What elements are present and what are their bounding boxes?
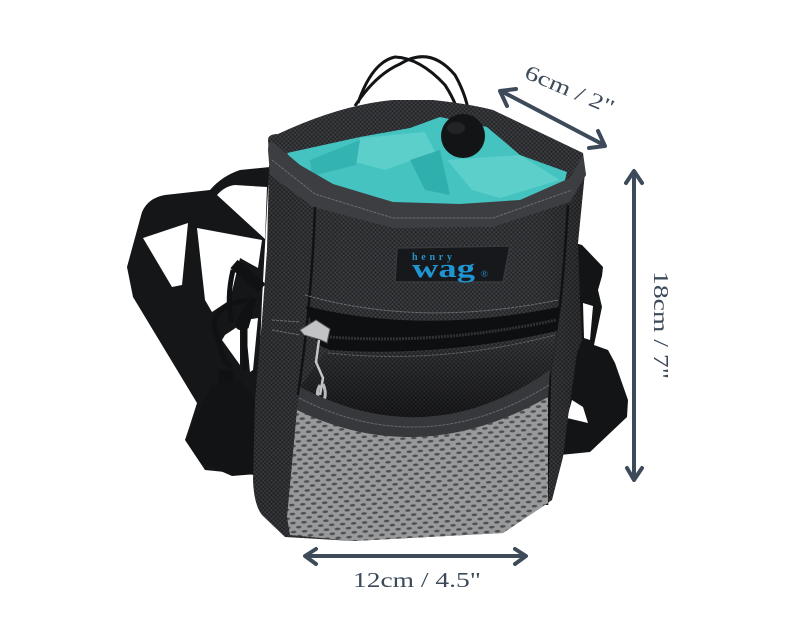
teal drawstring lining [287,117,567,212]
logo patch [395,246,510,283]
front rim binding [268,142,586,228]
logo patch: ® [481,269,488,279]
mesh pocket [287,370,550,541]
bag body [253,142,586,541]
label: 6cm / 2 inches: 6cm / 2" [521,60,618,119]
logo text: henry [412,252,452,263]
cord toggle [441,114,485,158]
upper pocket flap stitching [305,295,558,313]
label: 12cm / 4.5 inches: 12cm / 4.5" [353,568,481,592]
body seams [298,205,568,505]
arrow: width 12cm [305,549,526,564]
left shoulder strap [127,167,270,475]
drawstring cord [355,57,470,122]
arrow: height 18cm [626,171,642,480]
right shoulder strap and clip [560,243,628,455]
zipper pull [300,320,330,404]
zipper pocket [300,306,559,418]
left clip and buckle [186,264,262,476]
logo patch: wag [412,254,475,283]
bag back rim [268,100,586,210]
arrow: depth 6cm [500,89,605,148]
label: 18cm / 7 inches: 18cm / 7" [649,271,673,379]
